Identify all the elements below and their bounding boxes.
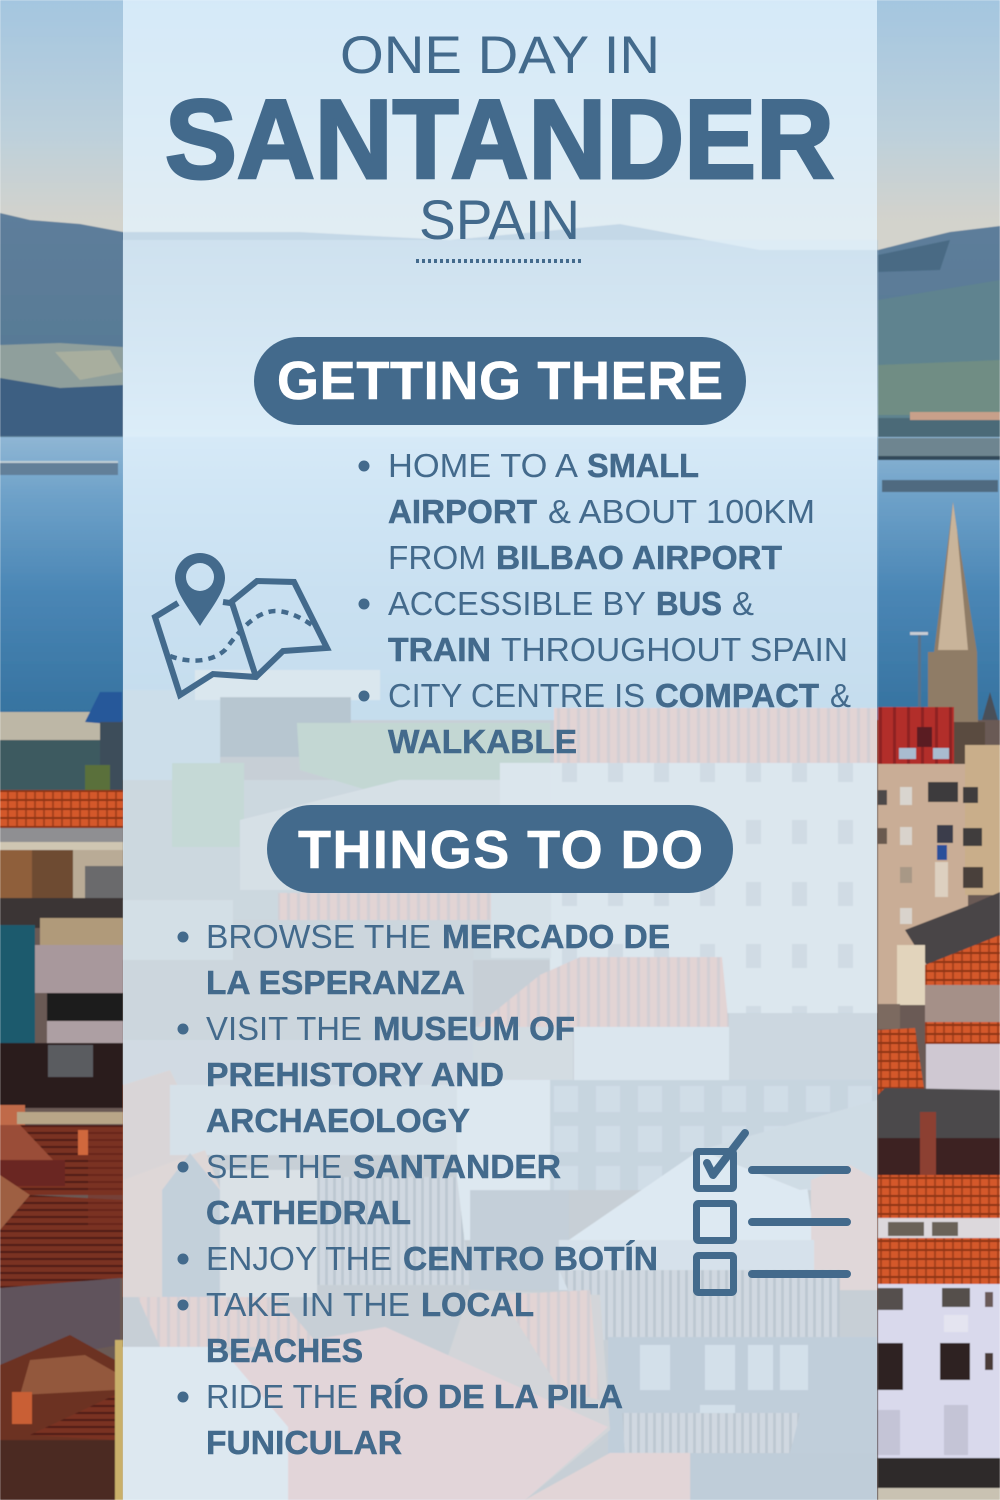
heading: getting there (254, 337, 746, 425)
title line: Santander: SANTANDER (165, 77, 834, 202)
text block: things to do list: FUNICULAR (206, 1424, 402, 1461)
text block: getting there list: FROM (388, 539, 486, 576)
text block: things to do list: TAKE IN THE (206, 1286, 410, 1323)
text block: things to do list: LOCAL (421, 1286, 534, 1323)
buildings seen through the panel (123, 690, 220, 800)
text block: getting there list: SMALL (587, 447, 699, 484)
text block: things to do list: LA ESPERANZA (206, 964, 465, 1001)
text block: things to do list: RÍO DE LA PILA (369, 1378, 623, 1415)
icon: checklist (696, 1133, 847, 1292)
text block: getting there list (358, 447, 851, 760)
text block: things to do list: MERCADO DE (442, 918, 670, 955)
text block: things to do list: BROWSE THE (206, 918, 431, 955)
text block: things to do list: ENJOY THE (206, 1240, 392, 1277)
heading: things to do: THINGS TO DO (298, 820, 703, 880)
panel: translucent centre column (123, 0, 877, 1500)
text block: getting there list: & ABOUT 100KM (548, 493, 815, 530)
text block: getting there list: & (732, 585, 754, 622)
text block: getting there list: BUS (656, 585, 722, 622)
text block: things to do list: VISIT THE (206, 1010, 362, 1047)
text block: things to do list: BEACHES (206, 1332, 363, 1369)
text block: things to do list: SEE THE (206, 1148, 342, 1185)
title line: Spain: SPAIN (419, 188, 580, 251)
icon: map with location pin (155, 553, 327, 695)
text block: things to do list: CATHEDRAL (206, 1194, 411, 1231)
text block: getting there list: CITY CENTRE IS (388, 677, 645, 714)
text block: things to do list: RIDE THE (206, 1378, 358, 1415)
text block: getting there list: TRAIN (388, 631, 491, 668)
text block: things to do list: SANTANDER (353, 1148, 561, 1185)
title line: one day in: ONE DAY IN (340, 26, 660, 85)
text block: getting there list: BILBAO AIRPORT (496, 539, 782, 576)
text block: things to do list: CENTRO BOTÍN (403, 1240, 658, 1277)
text block: getting there list: THROUGHOUT SPAIN (501, 631, 848, 668)
text block: things to do list: PREHISTORY AND (206, 1056, 504, 1093)
text block: getting there list: WALKABLE (388, 723, 577, 760)
text block: getting there list: COMPACT (655, 677, 819, 714)
text block: getting there list: & (830, 677, 851, 714)
text block: things to do list: ARCHAEOLOGY (206, 1102, 470, 1139)
heading: things to do (267, 805, 733, 893)
text block: things to do list (178, 918, 670, 1461)
heading: getting there: GETTING THERE (277, 351, 723, 411)
title (165, 26, 834, 261)
text block: things to do list: MUSEUM OF (373, 1010, 575, 1047)
text block: getting there list: AIRPORT (388, 493, 537, 530)
text block: getting there list: ACCESSIBLE BY (388, 585, 646, 622)
right buildings (928, 502, 978, 722)
left buildings (0, 712, 105, 742)
text block: getting there list: HOME TO A (388, 447, 578, 484)
